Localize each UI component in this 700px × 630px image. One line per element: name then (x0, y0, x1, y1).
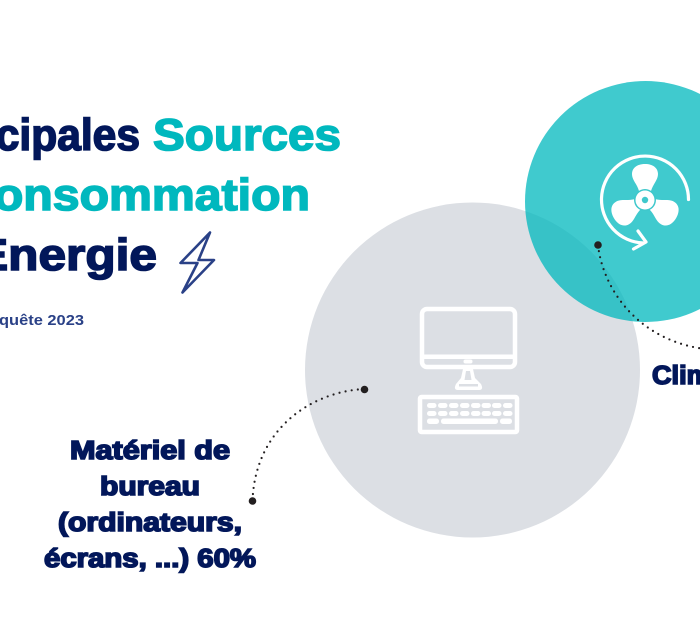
label: office equipment: écrans, ...) 60% (44, 545, 256, 573)
connector: air conditioning (594, 241, 700, 350)
label: office equipment: (ordinateurs, (58, 509, 242, 537)
circle: air conditioning (525, 81, 700, 322)
circle: office equipment (305, 202, 640, 538)
icon: computer and keyboard (420, 309, 517, 432)
label: office equipment: bureau (100, 473, 200, 501)
title (0, 111, 341, 280)
title line 1: sources: Sources (153, 111, 341, 160)
icon: fan with rotation arrow (602, 156, 688, 249)
connector: office equipment (249, 386, 368, 505)
label: office equipment (44, 437, 256, 573)
icon: lightning bolt (180, 232, 214, 292)
label: office equipment: Matériel de (70, 437, 230, 465)
